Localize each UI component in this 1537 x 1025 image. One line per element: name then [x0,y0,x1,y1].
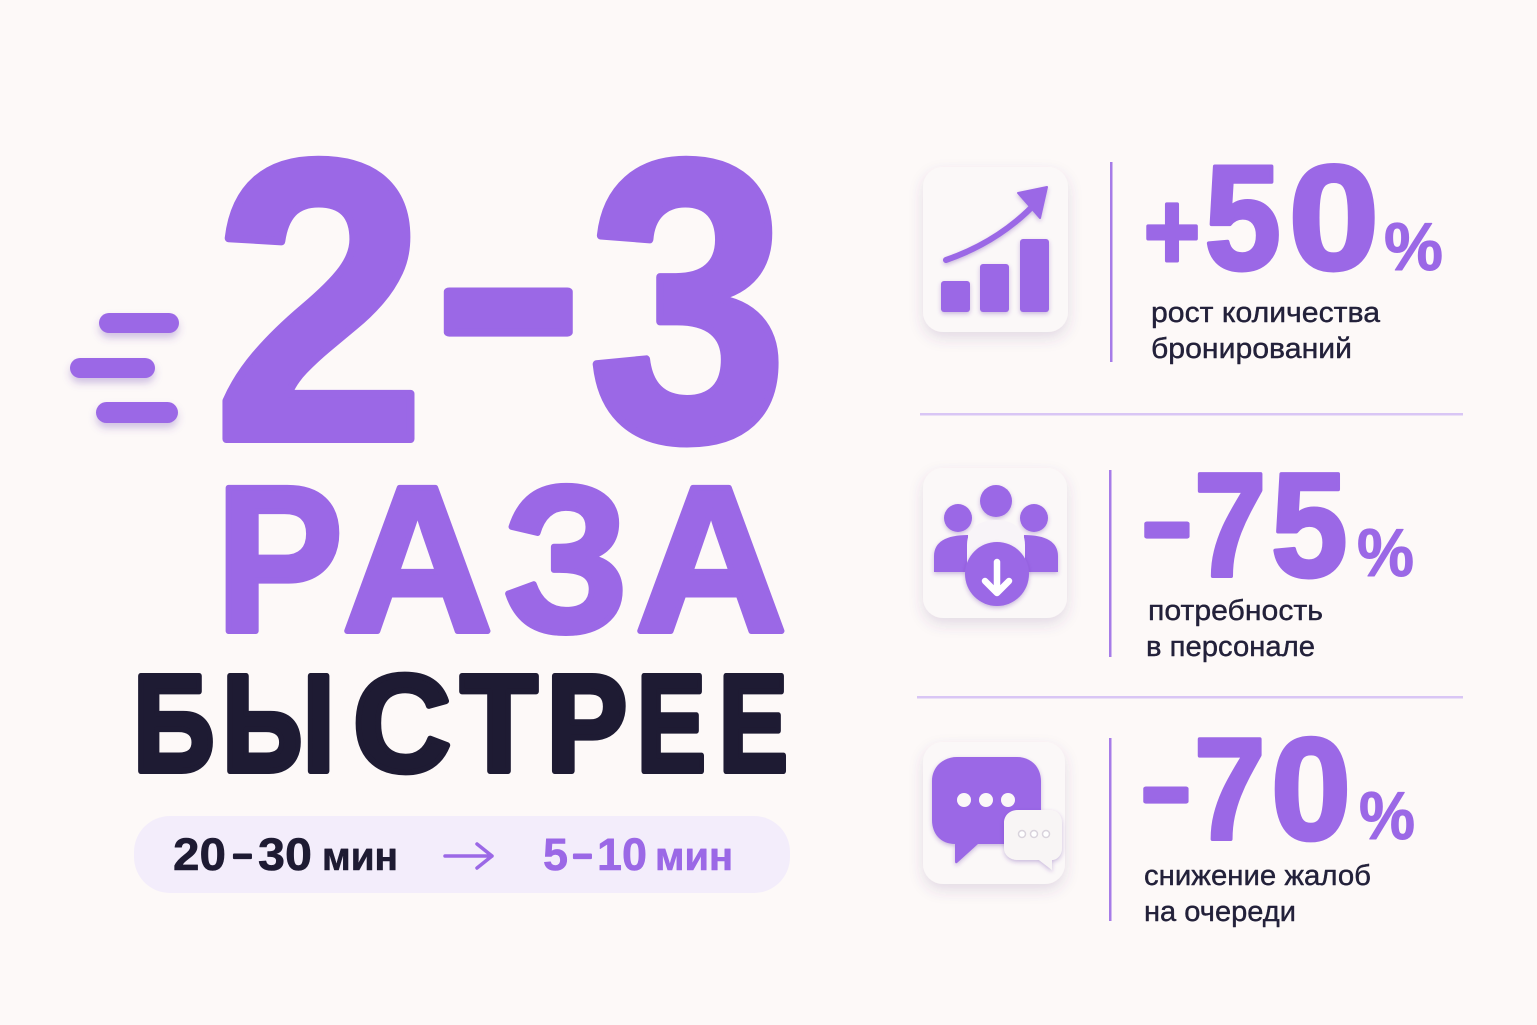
word БЫСТРЕЕ: Е [719,647,788,801]
panel: complaints stat [923,708,1415,928]
big number 2-3: 2 [213,77,426,524]
after time: 5 [543,829,568,880]
value -70%: 0 [1271,708,1351,870]
caption: на очереди [1144,896,1296,928]
arrow [445,844,492,868]
vertical rule [1109,738,1112,921]
icon: speed lines [70,313,179,423]
caption: снижение жалоб [1144,860,1371,892]
panel: bookings stat [923,134,1443,365]
icon: people with down arrow [923,468,1067,618]
percent sign: % [1384,209,1443,285]
word РАЗА: З [504,444,629,676]
value +50%: + [1144,170,1200,293]
word РАЗА: Р [216,444,343,676]
panel: staff stat [923,443,1414,663]
caption: в персонале [1146,631,1315,663]
word БЫСТРЕЕ: Р [546,647,627,801]
vertical rule [1109,470,1112,657]
value -75%: 7 [1194,443,1266,608]
word БЫСТРЕЕ: Б [133,647,214,801]
after time: – [573,836,592,874]
panel: time comparison pill [134,816,790,893]
caption: рост количества [1151,297,1381,329]
word РАЗА: А [342,444,493,676]
before time: мин [322,835,398,879]
caption: потребность [1148,595,1323,627]
after time: 10 [597,829,647,880]
value +50%: 5 [1204,134,1281,301]
divider: row 2 [917,696,1463,698]
word БЫСТРЕЕ: Т [460,647,538,801]
vertical rule [1110,162,1112,362]
value -75%: 5 [1271,443,1348,608]
percent sign: % [1359,778,1415,854]
big number 2-3: 3 [588,77,788,524]
word БЫСТРЕЕ: С [353,647,451,801]
value +50%: 0 [1288,134,1379,301]
before time: – [233,836,252,874]
icon: chat bubbles [923,742,1065,884]
value -70%: - [1140,725,1192,848]
panel: headline [70,77,788,801]
word РАЗА: А [635,444,787,676]
word БЫСТРЕЕ: Ы [222,647,335,801]
value -70%: 7 [1194,708,1266,870]
icon: growth chart [923,167,1068,332]
percent sign: % [1357,515,1414,591]
after time: мин [655,835,733,879]
value -75%: - [1141,460,1193,583]
divider: row 1 [920,413,1463,416]
caption: бронирований [1151,333,1352,365]
before time: 20 [173,829,226,880]
word БЫСТРЕЕ: Е [637,647,706,801]
before time: 30 [258,829,312,880]
big number 2-3: - [431,90,586,476]
